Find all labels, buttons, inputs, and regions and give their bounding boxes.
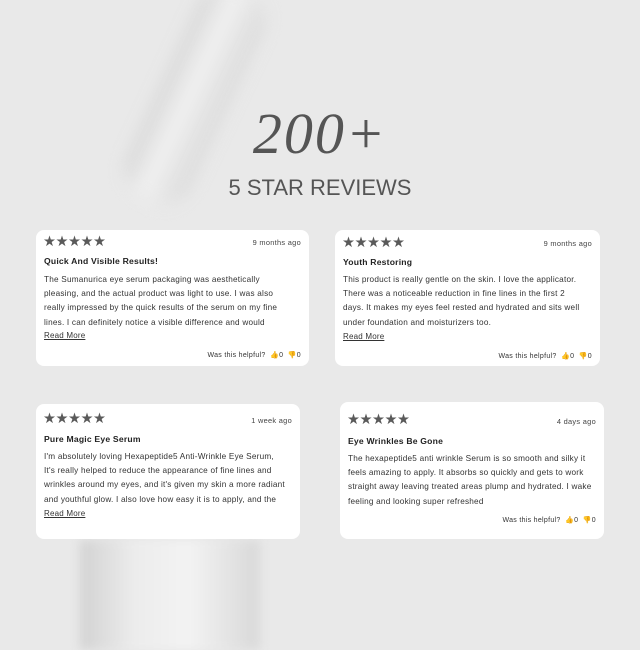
card: youth restoring: Read More [343,332,384,341]
card: youth restoring: This product is really gentle on the skin. I love the applicator. [343,275,576,284]
card: pure magic eye serum: wrinkles around my eyes, and it's given my skin a more radiant [44,480,285,489]
card: eye wrinkles be gone: The hexapeptide5 anti wrinkle Serum is so smooth and silky it [348,454,585,463]
card: quick and visible results: ★★★★★ [43,234,106,250]
card: pure magic eye serum [36,404,300,539]
card: quick and visible results: Read More [44,331,85,340]
card: eye wrinkles be gone: Eye Wrinkles Be Gone [348,436,443,446]
card: youth restoring [335,230,600,366]
card: eye wrinkles be gone: 4 days ago [557,417,596,426]
card: pure magic eye serum: and youthful glow. I also love how easy it is to apply, and the [44,495,276,504]
card: quick and visible results: 9 months ago [253,238,301,247]
card: pure magic eye serum: I'm absolutely loving Hexapeptide5 Anti-Wrinkle Eye Serum, [44,452,274,461]
card: quick and visible results: pleasing, and the actual product was light to use. I was also [44,289,273,298]
card: pure magic eye serum: 1 week ago [251,416,292,425]
card: eye wrinkles be gone: Was this helpful? 👍0 👎0 [502,517,596,524]
card: quick and visible results [36,230,309,366]
card: youth restoring: 9 months ago [544,239,592,248]
card: eye wrinkles be gone [340,402,604,539]
card: youth restoring: Was this helpful? 👍0 👎0 [498,353,592,360]
card: youth restoring: days. It makes my eyes feel rested and hydrated and sits well [343,303,579,312]
card: youth restoring: ★★★★★ [342,235,404,251]
subtitle: 5 STAR REVIEWS [229,175,411,200]
card: eye wrinkles be gone: feels amazing to apply. It absorbs so quickly and gets to work [348,468,584,477]
card: youth restoring: under foundation and moisturizers too. [343,318,491,327]
card: youth restoring: There was a noticeable reduction in fine lines in the first 2 [343,289,565,298]
title: 200+ [253,101,387,166]
card: pure magic eye serum: It's really helped to reduce the appearance of fine lines and [44,466,272,475]
card: eye wrinkles be gone: straight away leaving treated areas plump and hydrated. I wake [348,482,591,491]
card: quick and visible results: lines. I can definitely notice a visible difference and would [44,318,265,327]
card: eye wrinkles be gone: ★★★★★ [347,412,410,428]
card: eye wrinkles be gone: feeling and looking super refreshed [348,497,484,506]
card: youth restoring: Youth Restoring [343,257,412,267]
card: pure magic eye serum: Pure Magic Eye Serum [44,434,141,444]
card: quick and visible results: really impressed by the quick results of the serum on my fine [44,303,277,312]
card: pure magic eye serum: Read More [44,509,85,518]
card: quick and visible results: Quick And Visible Results! [44,256,158,266]
card: quick and visible results: The Sumanurica eye serum packaging was aesthetically [44,275,260,284]
card: quick and visible results: Was this helpful? 👍0 👎0 [207,352,301,359]
card: pure magic eye serum: ★★★★★ [43,411,106,427]
